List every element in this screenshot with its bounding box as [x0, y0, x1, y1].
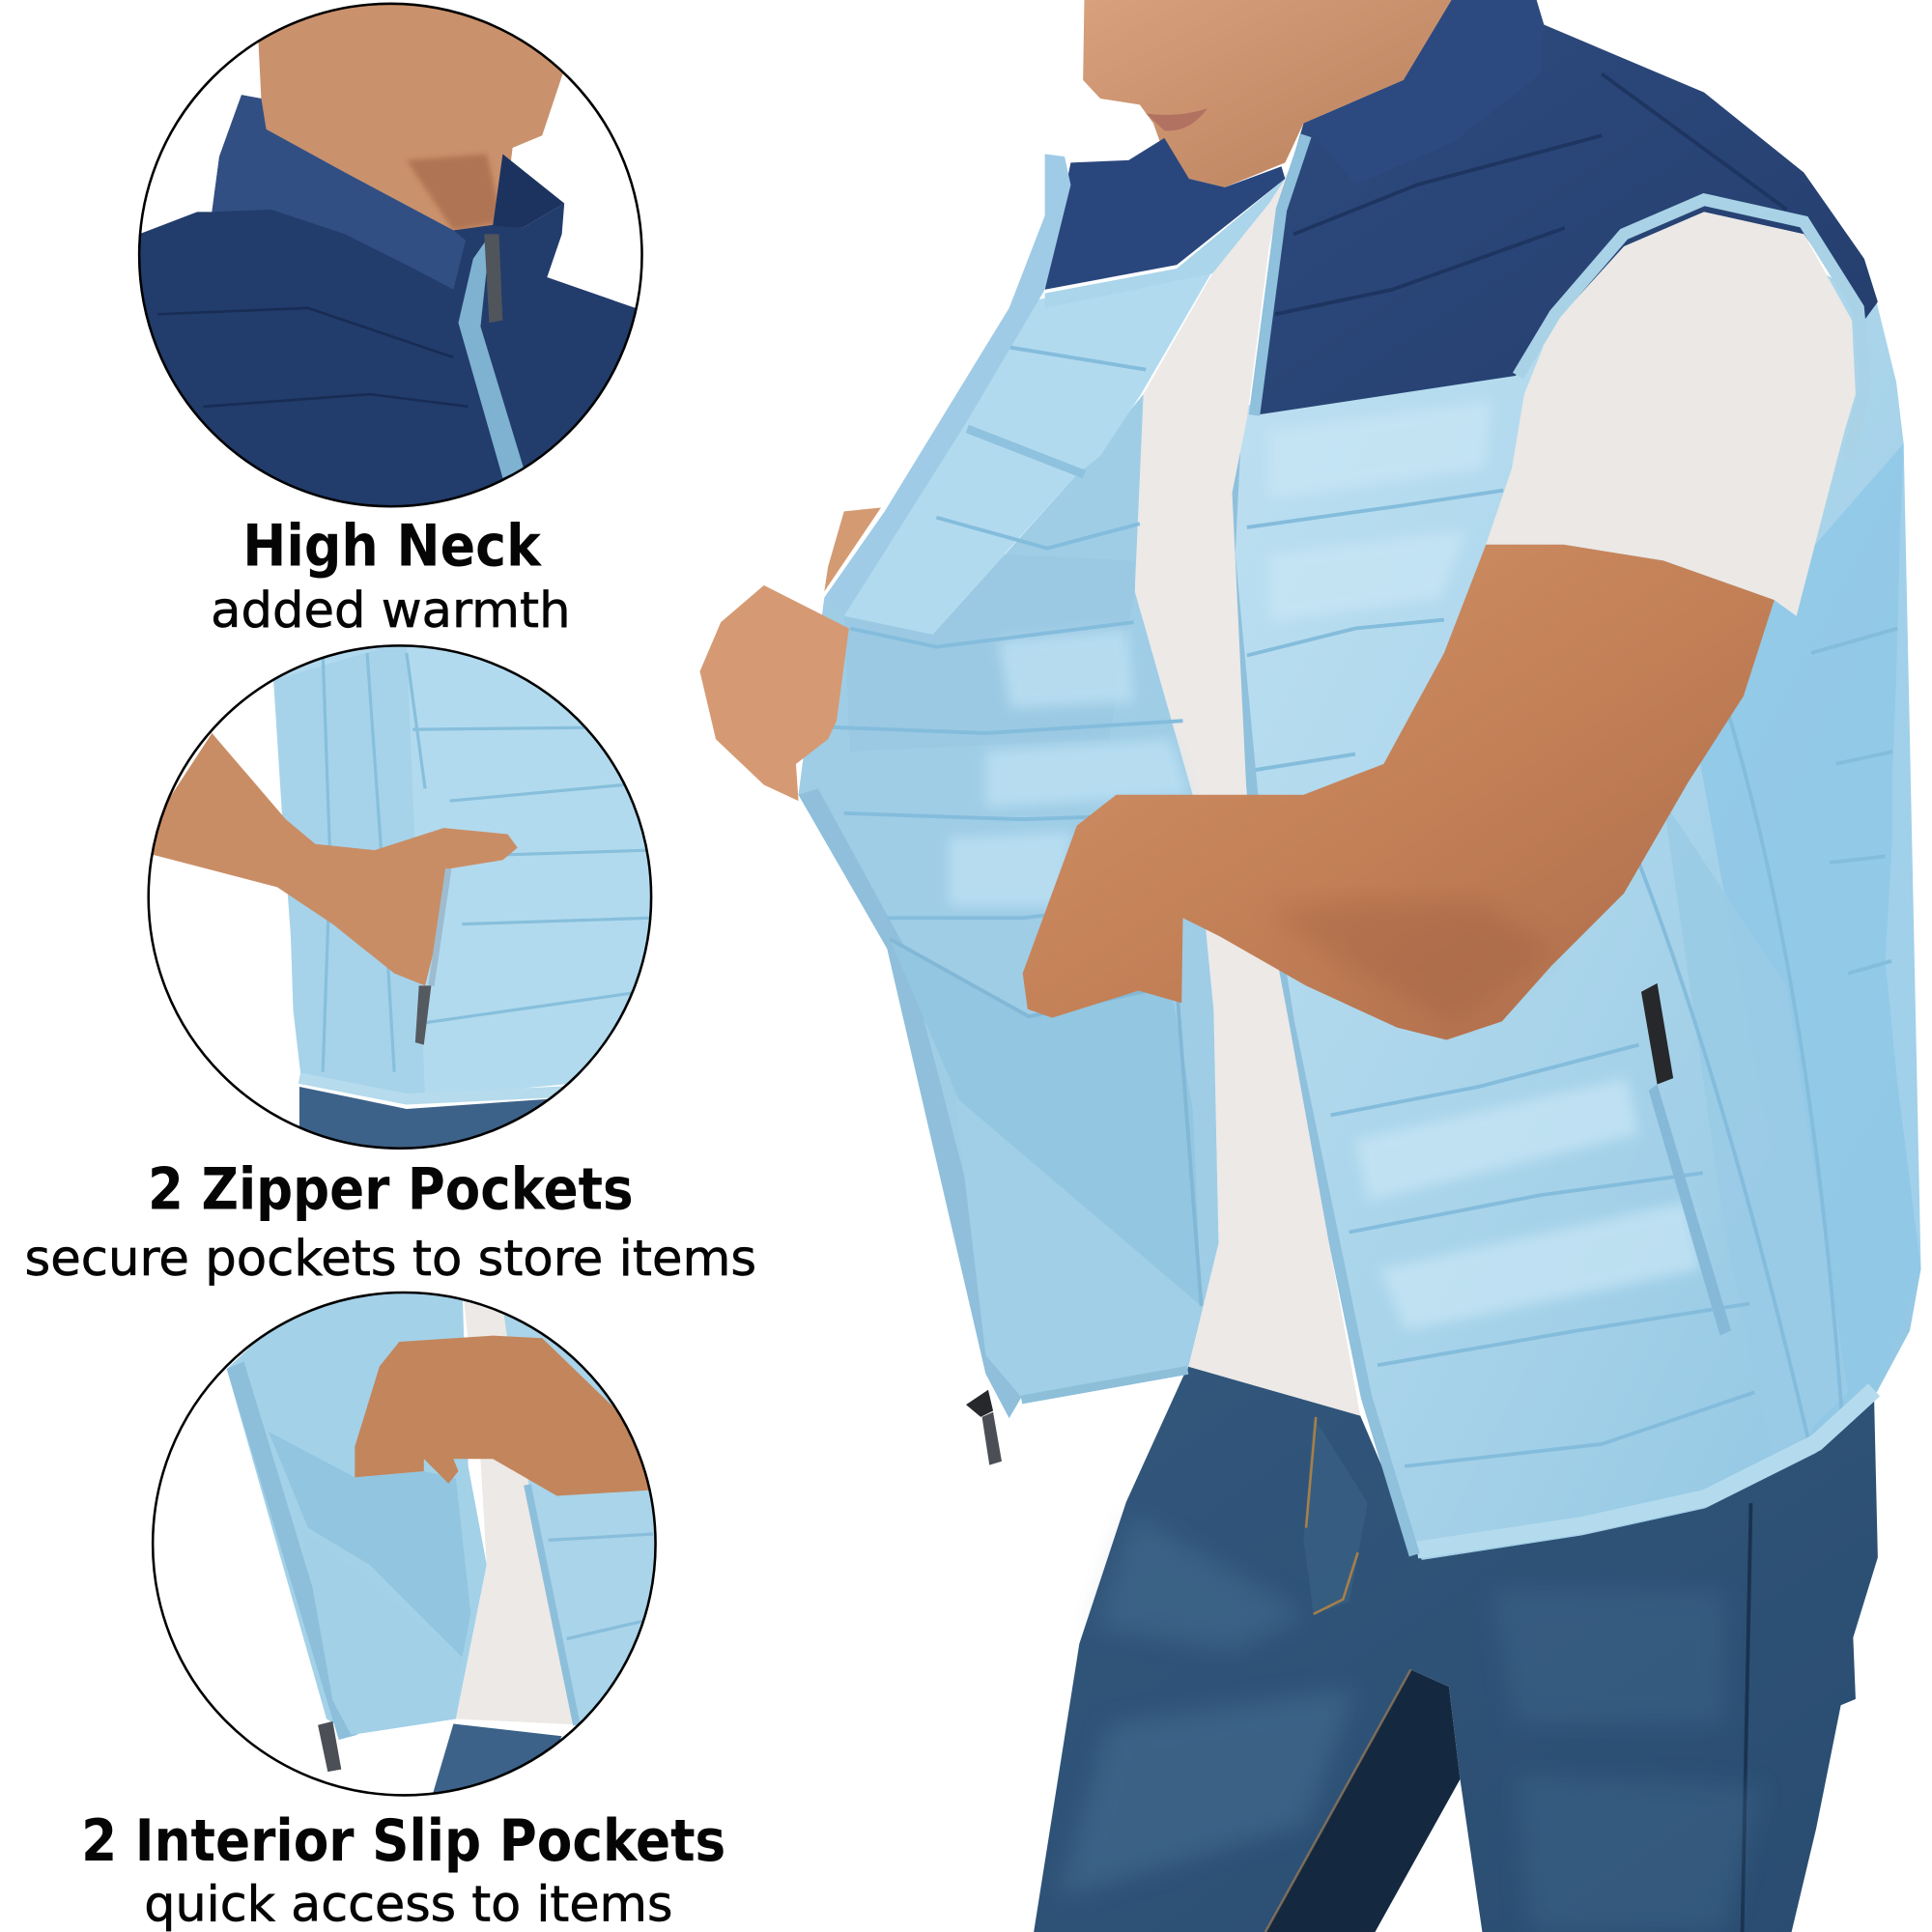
armhole binding	[1518, 200, 1865, 458]
forearm shadow	[1269, 899, 1552, 1023]
zipper edge	[227, 1361, 357, 1740]
interior pocket	[890, 939, 1202, 1306]
panel: High Neck close-up	[124, 0, 653, 518]
face and neck	[1083, 0, 1452, 187]
panel: Zipper Pockets close-up	[135, 640, 653, 1158]
vest body	[273, 640, 653, 1099]
collar and shoulders	[124, 95, 653, 518]
t-shirt	[456, 1301, 573, 1724]
lining puff highlights	[949, 629, 1189, 906]
panel: Interior Slip Pockets close-up	[153, 1282, 666, 1799]
caption: secure pockets to store items: secure pockets to store items	[25, 1231, 756, 1288]
heading: High Neck: High Neck	[242, 512, 542, 580]
lower lining	[313, 1588, 456, 1735]
zipper	[431, 868, 448, 985]
thumb	[824, 508, 881, 591]
zipper pull, loose end	[966, 1390, 1002, 1465]
open flap: lining	[799, 138, 1285, 1418]
t-shirt sleeve	[1486, 212, 1856, 616]
lips	[1146, 108, 1208, 130]
vest: navy yoke and collar	[1254, 0, 1878, 415]
hand holding the flap	[699, 585, 849, 801]
arm and hand	[355, 1336, 659, 1495]
neck skin	[259, 5, 563, 230]
vest: outer front and side panels	[1230, 210, 1921, 1560]
arm and hand	[135, 733, 518, 985]
caption: quick access to items: quick access to items	[144, 1877, 672, 1932]
quilt puff highlights	[1269, 401, 1700, 1331]
jeans	[1034, 1367, 1878, 1932]
arm and hand in pocket	[1023, 545, 1775, 1040]
photo: man wearing the vest	[699, 0, 1921, 1932]
hem band	[299, 1078, 591, 1099]
caption: added warmth: added warmth	[211, 582, 571, 639]
jeans	[431, 1723, 562, 1799]
vest front	[504, 1314, 655, 1721]
zipper tape	[458, 234, 524, 478]
lining	[227, 1282, 487, 1735]
slip pocket	[269, 1432, 470, 1658]
heading: 2 Interior Slip Pockets: 2 Interior Slip Pockets	[81, 1807, 725, 1875]
zipper pull	[318, 1721, 341, 1772]
heading: 2 Zipper Pockets: 2 Zipper Pockets	[148, 1155, 634, 1223]
zipper pull	[484, 234, 502, 323]
vest pocket zipper	[1641, 983, 1731, 1336]
t-shirt torso	[1135, 173, 1360, 1416]
jeans	[299, 1087, 548, 1148]
